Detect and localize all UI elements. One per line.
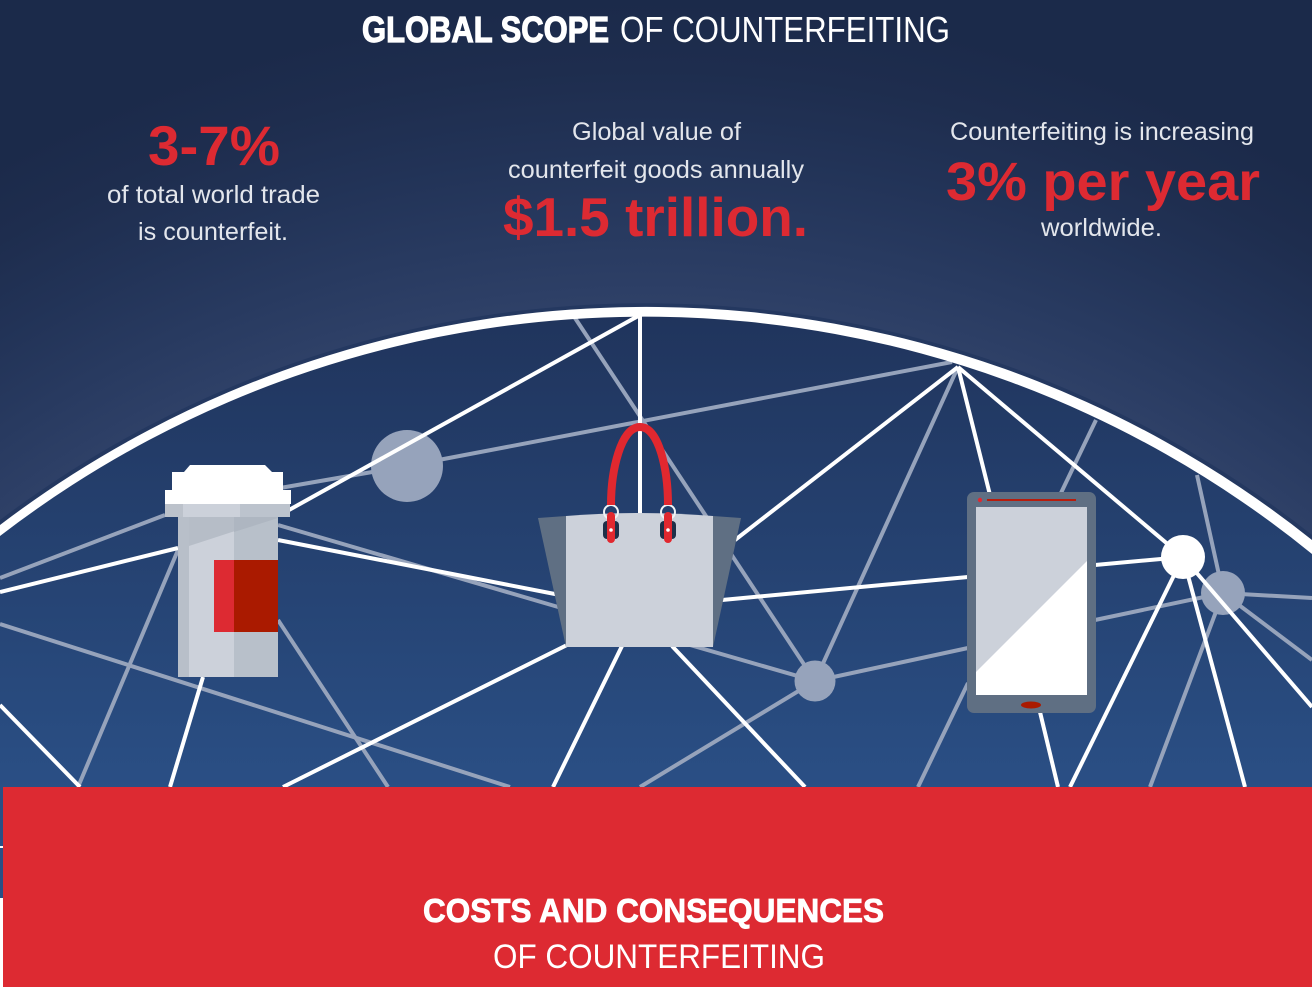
stat: share of world trade: of total world trade	[107, 181, 320, 209]
stat: share of world trade	[107, 114, 320, 246]
stat: share of world trade: 3-7%	[148, 114, 280, 177]
stat: global value	[503, 118, 808, 248]
network of grey connection lines	[0, 318, 1312, 787]
title: GLOBAL SCOPE	[362, 9, 609, 50]
stat: annual growth: worldwide.	[1040, 214, 1162, 242]
network of white connection lines	[0, 315, 1312, 787]
network nodes: grey	[371, 430, 1245, 702]
heading: costs and consequences	[423, 892, 884, 976]
stat: annual growth: 3% per year	[946, 152, 1260, 212]
left edge tick	[0, 846, 3, 848]
icon: pill bottle	[165, 465, 291, 677]
heading: costs and consequences: OF COUNTERFEITING	[493, 938, 825, 976]
heading: costs and consequences: COSTS AND CONSEQUENCES	[423, 892, 884, 929]
stat: global value: Global value of	[572, 118, 741, 146]
stat: annual growth	[946, 118, 1260, 242]
globe outline arc	[0, 307, 1312, 554]
stat: annual growth: Counterfeiting is increasing	[950, 118, 1254, 146]
icon: handbag	[538, 427, 741, 647]
panel: sky background	[0, 0, 1312, 600]
network node: white	[1161, 535, 1205, 579]
panel: red costs band	[3, 787, 1312, 987]
stat: share of world trade: is counterfeit.	[138, 218, 288, 246]
title: OF COUNTERFEITING	[620, 9, 950, 50]
stat: global value: $1.5 trillion.	[503, 186, 808, 248]
icon: tablet	[967, 492, 1096, 713]
title	[362, 9, 950, 50]
stat: global value: counterfeit goods annually	[508, 156, 805, 184]
panel: globe body	[0, 303, 1312, 898]
